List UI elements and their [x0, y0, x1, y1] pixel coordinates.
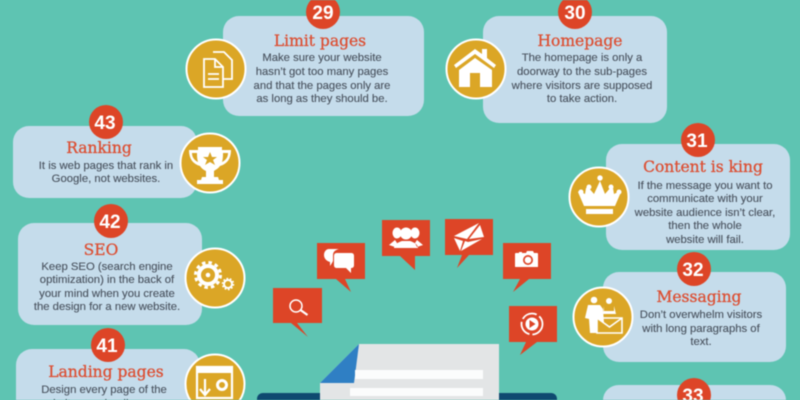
speech bubble icon: play — [509, 306, 557, 355]
panel: 41 landing pages: 41 — [96, 336, 118, 357]
panel: 42 seo: 42 — [99, 212, 121, 233]
panel: 32 messaging: 32 — [682, 260, 704, 281]
panel: 31 content is king: website audience isn’t clear, — [634, 207, 775, 219]
panel: 42 seo: optimization) in the back of — [40, 274, 175, 286]
panel: 41 landing pages: Landing pages — [48, 363, 164, 381]
panel: 31 content is king: website will fail. — [665, 234, 744, 246]
panel: 31 content is king: then the whole — [668, 220, 742, 232]
panel: 31 content is king: 31 — [686, 131, 708, 152]
speech bubble icon: camera — [503, 243, 551, 292]
panel: 41 landing pages — [16, 328, 244, 400]
panel: 42 seo: SEO — [84, 241, 118, 259]
panel: 32 messaging: with long paragraphs of — [641, 323, 761, 335]
panel: 30 homepage: where visitors are supposed — [511, 80, 652, 92]
speech bubble icon: chat — [317, 243, 365, 292]
panel: 30 homepage: doorway to the sub-pages — [517, 66, 647, 78]
panel: 43 ranking: Ranking — [66, 139, 132, 157]
panel: 30 homepage: Homepage — [538, 32, 622, 50]
panel: 43 ranking: It is web pages that rank in — [39, 160, 173, 172]
speech bubble icon: search — [273, 288, 322, 337]
panel: 31 content is king: Content is king — [643, 158, 763, 176]
panel: 29 limit pages: Make sure your website — [262, 52, 382, 64]
speech bubble icon: people — [382, 220, 430, 270]
panel: 32 messaging: Don’t overwhelm visitors — [640, 309, 763, 321]
panel: 32 messaging: Messaging — [657, 288, 742, 306]
panel: 29 limit pages — [186, 0, 424, 116]
panel: 32 messaging: text. — [690, 336, 712, 348]
panel: 29 limit pages: as long as they should be. — [256, 93, 388, 105]
panel: 30 homepage: The homepage is only a — [522, 52, 643, 64]
panel: 43 ranking: 43 — [94, 113, 116, 134]
panel: 43 ranking: Google, not websites. — [52, 173, 160, 185]
panel: 29 limit pages: and that the pages only are — [254, 80, 390, 92]
panel: 29 limit pages: 29 — [312, 3, 334, 24]
panel: 31 content is king — [570, 123, 790, 250]
panel: 32 messaging — [574, 252, 786, 362]
monitor base bar — [257, 393, 557, 400]
speech bubble icon: mail — [445, 219, 493, 268]
panel: 30 homepage: 30 — [564, 3, 586, 24]
panel: 43 ranking — [13, 105, 240, 198]
document sheet — [320, 344, 499, 400]
panel: 42 seo — [18, 204, 244, 325]
panel: 31 content is king: communicate with your — [647, 193, 763, 205]
panel: 30 homepage — [446, 0, 667, 123]
panel: 33 — [603, 378, 786, 400]
panel: 42 seo: Keep SEO (search engine — [41, 261, 173, 273]
panel: 42 seo: the design for a new website. — [34, 301, 180, 313]
panel: 29 limit pages: hasn’t got too many pages — [256, 66, 389, 78]
panel: 42 seo: your mind when you create — [39, 288, 175, 300]
panel: 41 landing pages: Design every page of the — [41, 384, 167, 396]
panel: 29 limit pages: Limit pages — [274, 32, 366, 50]
panel: 30 homepage: to take action. — [547, 93, 617, 105]
panel: 31 content is king: If the message you want to — [637, 180, 773, 192]
